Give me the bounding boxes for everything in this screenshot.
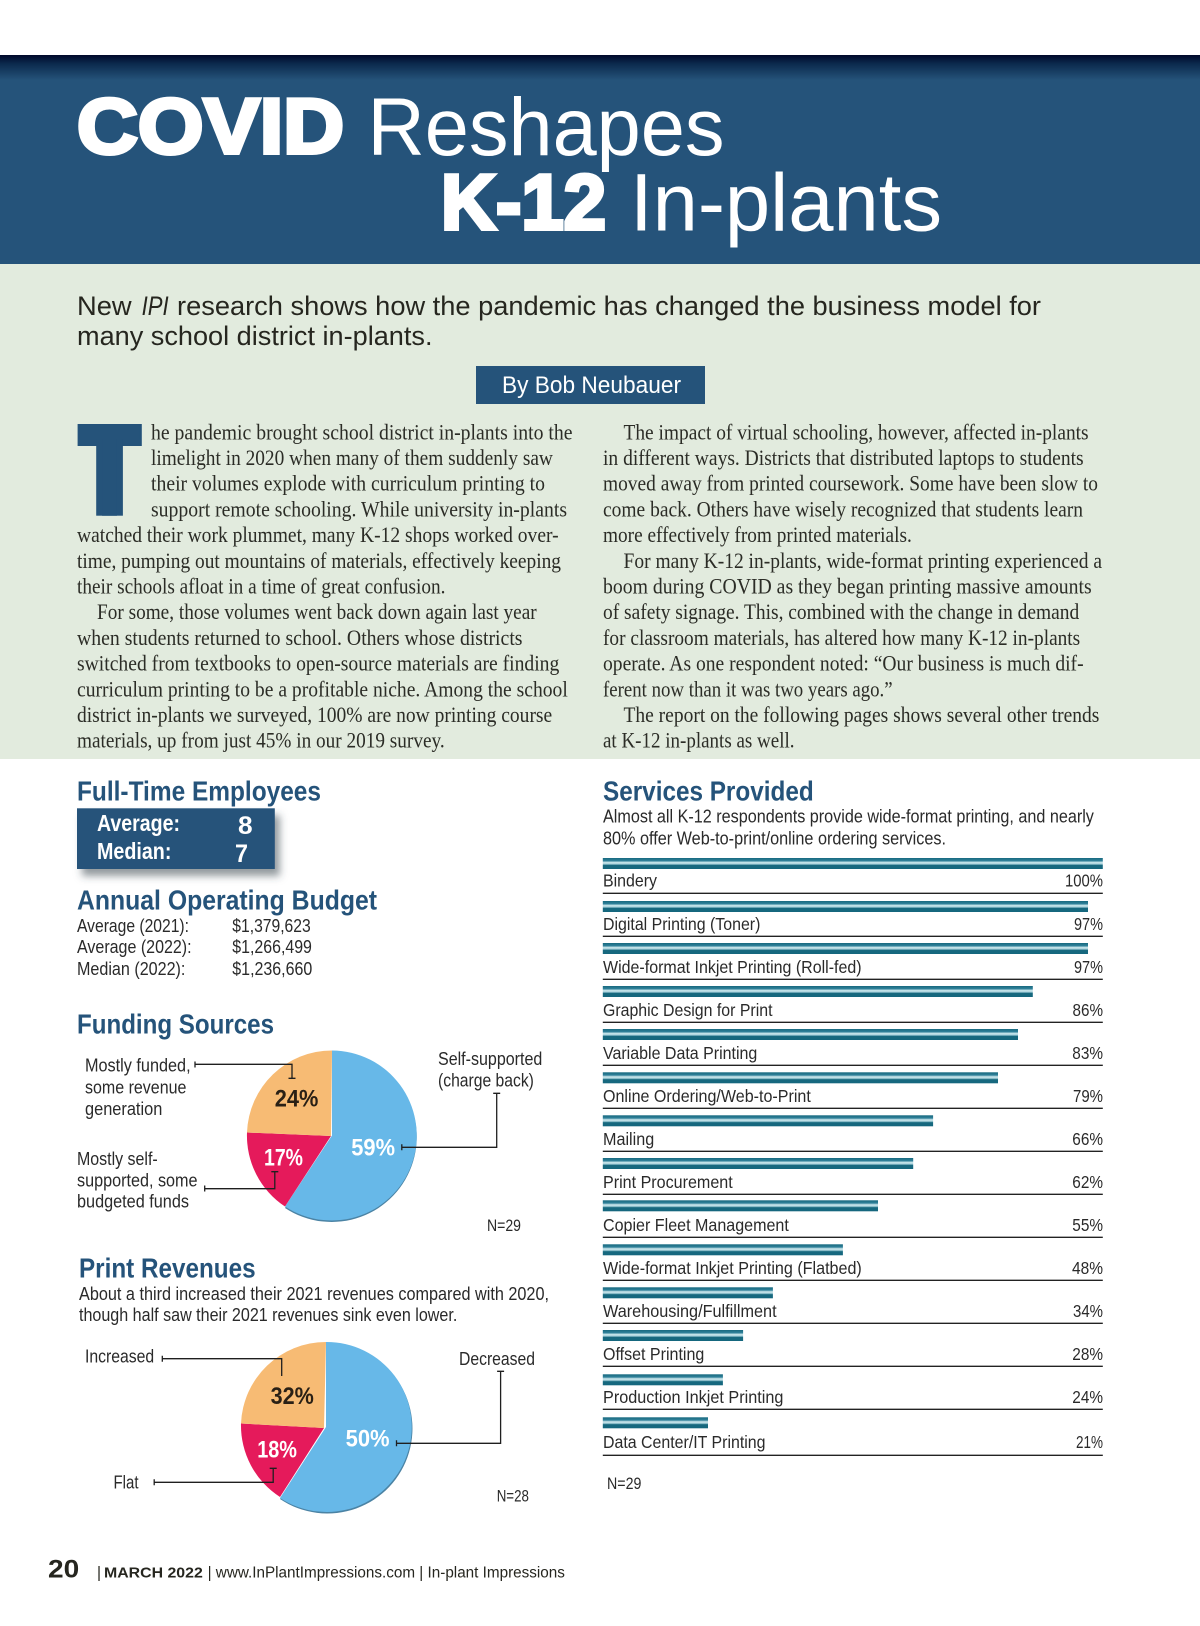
bar: offset: 28% (1072, 1344, 1103, 1364)
bar: offset (603, 1330, 1103, 1366)
article column 2: moved away from printed coursework. Some have been slow to (603, 471, 1098, 496)
byline: By Bob Neubauer (502, 372, 681, 399)
bar: copier fleet: 55% (1072, 1215, 1103, 1235)
heading: annual operating budget: Annual Operating Budget (77, 884, 377, 915)
callout: increased: Increased (85, 1346, 154, 1366)
callout: flat (114, 1468, 277, 1492)
article column 2: The report on the following pages shows several other trends (624, 702, 1099, 727)
bar: online ordering: Online Ordering/Web-to-Print (603, 1086, 811, 1106)
subtitle: research shows how the pandemic has changed the business model for (177, 291, 1041, 321)
bar: variable data: Variable Data Printing (603, 1043, 757, 1063)
callout: mostly funded (85, 1056, 296, 1119)
title: K-12 (441, 158, 606, 246)
pie chart: funding sources: 59% (351, 1135, 395, 1162)
article column 1: time, pumping out mountains of materials, effectively keeping (77, 548, 561, 573)
budget table: $1,266,499 (232, 937, 312, 957)
panel: full-time employees (77, 776, 321, 869)
bar: warehousing: 34% (1073, 1301, 1103, 1321)
pie chart: print revenues: 18% (257, 1437, 297, 1464)
article column 2: ferent now than it was two years ago.” (603, 676, 893, 701)
heading: print revenues: Print Revenues (79, 1252, 256, 1284)
sample size: N=29 (607, 1475, 641, 1493)
byline (476, 366, 705, 404)
heading: services provided: Services Provided (603, 776, 814, 807)
footer text: MARCH 2022 (104, 1564, 203, 1581)
article column 1: For some, those volumes went back down again last year (97, 599, 537, 624)
bar: print procurement: 62% (1072, 1172, 1103, 1192)
budget table: Average (2022): (77, 937, 192, 957)
callout: mostly funded: Mostly funded, (85, 1056, 191, 1076)
article column 1: district in-plants we surveyed, 100% are now printing course (77, 702, 552, 727)
bar: variable data: 83% (1072, 1043, 1103, 1063)
stat box: 8 (238, 812, 253, 840)
description (79, 1284, 549, 1325)
bar: mailing: 66% (1072, 1129, 1103, 1149)
pie chart: funding sources (247, 1050, 417, 1222)
bar: production inkjet (603, 1374, 1103, 1409)
article column 2: of safety signage. This, combined with the change in demand (603, 599, 1079, 624)
bar: online ordering: 79% (1073, 1086, 1103, 1106)
drop cap T: T (78, 397, 141, 545)
bar: graphic design: 86% (1072, 1000, 1103, 1020)
article column 2: For many K-12 in-plants, wide-format printing experienced a (624, 548, 1102, 573)
bar: graphic design: Graphic Design for Print (603, 1000, 773, 1020)
bar: wide-format flatbed (603, 1244, 1103, 1280)
budget table: Average (2021): (77, 916, 189, 936)
bar: mailing (603, 1115, 1103, 1151)
bar: bindery: 100% (1065, 871, 1103, 891)
bar: wide-format flatbed: 48% (1072, 1258, 1103, 1278)
header banner (0, 55, 1200, 264)
sample size: N=29 (487, 1217, 521, 1235)
bar: wide-format roll-fed (603, 943, 1103, 979)
bar: wide-format roll-fed: 97% (1074, 957, 1103, 977)
budget table: $1,236,660 (232, 959, 312, 979)
article column 1: curriculum printing to be a profitable niche. Among the school (77, 676, 568, 701)
callout: increased (85, 1346, 282, 1376)
article column 1: he pandemic brought school district in-plants into the (151, 419, 573, 444)
bar chart: services (603, 858, 1103, 1455)
article column 1: when students returned to school. Others whose districts (77, 625, 522, 650)
callout: decreased: Decreased (459, 1349, 535, 1369)
sample size: N=28 (497, 1488, 529, 1506)
article column 1: materials, up from just 45% in our 2019 survey. (77, 728, 445, 753)
article column 1: support remote schooling. While university in-plants (151, 496, 567, 521)
subtitle: New (77, 291, 132, 321)
bar: print procurement (603, 1158, 1103, 1194)
footer text: | (97, 1564, 101, 1581)
bar: warehousing (603, 1287, 1103, 1323)
bar: offset: Offset Printing (603, 1344, 704, 1364)
article column 1: their volumes explode with curriculum printing to (151, 471, 545, 496)
bar: bindery: Bindery (603, 871, 657, 891)
stat box: Average: (97, 810, 180, 836)
panel: annual operating budget (77, 884, 377, 979)
pie chart: funding sources: 24% (275, 1086, 318, 1113)
footer text: | www.InPlantImpressions.com | In-plant Impressions (208, 1564, 565, 1581)
callout: self-supported: Self-supported (438, 1049, 542, 1069)
bar: data center (603, 1417, 1103, 1455)
article column 1: watched their work plummet, many K-12 shops worked over- (77, 522, 559, 547)
panel: services provided (603, 776, 1103, 1493)
bar: mailing: Mailing (603, 1129, 654, 1149)
heading: funding sources: Funding Sources (77, 1008, 274, 1039)
title: In-plants (630, 158, 942, 249)
bar: copier fleet (603, 1200, 1103, 1237)
subtitle: many school district in-plants. (77, 321, 432, 351)
bar: wide-format roll-fed: Wide-format Inkjet Printing (Roll-fed) (603, 957, 862, 977)
callout: mostly self-supported: supported, some (77, 1170, 198, 1190)
article column 1: their schools afloat in a time of great confusion. (77, 574, 445, 598)
callout: self-supported (402, 1049, 542, 1150)
article column 2: boom during COVID as they began printing massive amounts (603, 574, 1092, 598)
description: Almost all K-12 respondents provide wide-format printing, and nearly (603, 806, 1094, 826)
bar: graphic design (603, 986, 1103, 1022)
callout: decreased (396, 1349, 535, 1446)
bar: copier fleet: Copier Fleet Management (603, 1215, 789, 1235)
pie chart: print revenues: 50% (346, 1426, 390, 1453)
subtitle: IPI (142, 291, 169, 321)
article column 1: switched from textbooks to open-source materials are finding (77, 651, 559, 676)
budget table: $1,379,623 (232, 916, 311, 936)
title: Reshapes (368, 82, 724, 173)
article column 2: in different ways. Districts that distributed laptops to students (603, 445, 1084, 470)
article column 2: more effectively from printed materials. (603, 522, 912, 547)
pie chart: print revenues (241, 1342, 412, 1513)
callout: mostly funded: generation (85, 1099, 162, 1119)
bar: digital printing (603, 901, 1103, 936)
description: 80% offer Web-to-print/online ordering services. (603, 828, 946, 848)
article column 2: for classroom materials, has altered how many K-12 in-plants (603, 625, 1080, 650)
title (77, 82, 942, 249)
callout: self-supported: (charge back) (438, 1071, 534, 1091)
callout: mostly self-supported (77, 1149, 278, 1212)
description (603, 806, 1094, 848)
article column 2 (603, 419, 1102, 753)
article column 1 (77, 419, 573, 753)
budget table (77, 916, 312, 979)
footer (48, 1555, 565, 1583)
title: COVID (77, 82, 344, 170)
green article panel (0, 264, 1200, 759)
description: though half saw their 2021 revenues sink even lower. (79, 1305, 457, 1325)
callout: mostly self-supported: Mostly self- (77, 1149, 158, 1169)
article column 2: operate. As one respondent noted: “Our business is much dif- (603, 651, 1084, 676)
bar: variable data (603, 1029, 1103, 1065)
article column 1: limelight in 2020 when many of them suddenly saw (151, 445, 554, 470)
stat box: 7 (235, 840, 248, 868)
stat box: Median: (97, 838, 171, 864)
bar: digital printing: Digital Printing (Toner) (603, 914, 760, 934)
article column 2: come back. Others have wisely recognized that students learn (603, 496, 1083, 521)
stat box (77, 808, 275, 869)
article column 2: The impact of virtual schooling, however, affected in-plants (624, 419, 1089, 444)
panel: print revenues (79, 1252, 549, 1513)
callout: mostly self-supported: budgeted funds (77, 1192, 189, 1212)
budget table: Median (2022): (77, 959, 185, 979)
subtitle (77, 291, 1041, 351)
article column 2: at K-12 in-plants as well. (603, 728, 794, 753)
bar: production inkjet: Production Inkjet Printing (603, 1387, 783, 1407)
description: About a third increased their 2021 revenues compared with 2020, (79, 1284, 549, 1304)
bar: data center: 21% (1076, 1432, 1103, 1452)
heading: full-time employees: Full-Time Employees (77, 776, 321, 807)
bar: digital printing: 97% (1074, 914, 1103, 934)
callout: mostly funded: some revenue (85, 1077, 186, 1097)
bar: bindery (603, 858, 1103, 893)
bar: data center: Data Center/IT Printing (603, 1432, 766, 1452)
bar: online ordering (603, 1072, 1103, 1108)
bar: production inkjet: 24% (1072, 1387, 1103, 1407)
bar: wide-format flatbed: Wide-format Inkjet Printing (Flatbed) (603, 1258, 862, 1278)
pie chart: print revenues: 32% (271, 1383, 314, 1410)
panel: funding sources (77, 1008, 542, 1235)
callout: flat: Flat (114, 1472, 138, 1492)
bar: print procurement: Print Procurement (603, 1172, 733, 1192)
pie chart: funding sources: 17% (264, 1145, 303, 1172)
bar: warehousing: Warehousing/Fulfillment (603, 1301, 777, 1321)
page number: 20 (48, 1555, 79, 1583)
